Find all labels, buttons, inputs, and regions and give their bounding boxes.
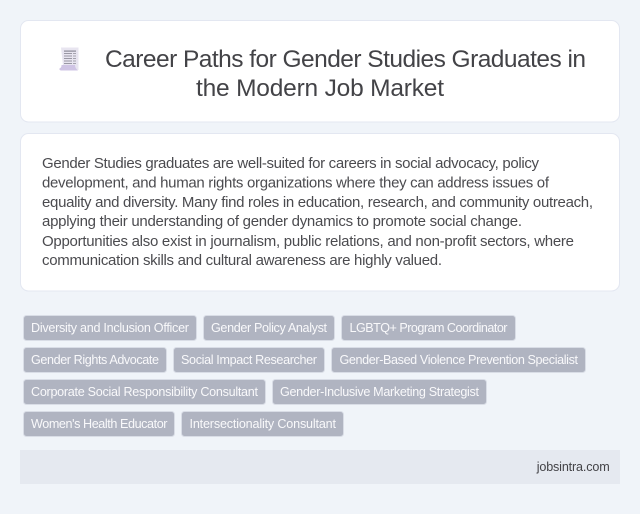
description text block: development, and human rights organizations where they can address issues of: [42, 174, 550, 192]
tag: Diversity and Inclusion Officer: [24, 316, 196, 340]
footer source text: jobsintra.com: [536, 460, 610, 474]
panel: description: [20, 134, 620, 291]
tag: Gender-Inclusive Marketing Strategist: [272, 380, 486, 404]
panel: title header: [20, 20, 620, 122]
description text block: Opportunities also exist in journalism, public relations, and non-profit sectors, where: [42, 233, 574, 250]
tag: Corporate Social Responsibility Consultant: Corporate Social Responsibility Consultant: [31, 385, 258, 399]
career tags: [24, 316, 586, 436]
description text block: equality and diversity. Many find roles in education, research, and community outreach,: [42, 194, 593, 211]
tag: Diversity and Inclusion Officer: Diversity and Inclusion Officer: [31, 321, 189, 335]
description text block: applying their understanding of gender dynamics to promote social change.: [42, 213, 522, 230]
tag: Social Impact Researcher: Social Impact Researcher: [181, 353, 317, 367]
description text block: [42, 155, 593, 269]
title: [105, 46, 586, 102]
icon: document scroll: [59, 48, 78, 70]
description text block: Gender Studies graduates are well-suited for careers in social advocacy, policy: [42, 155, 540, 172]
title: the Modern Job Market: [196, 75, 444, 102]
tag: LGBTQ+ Program Coordinator: [342, 316, 516, 340]
tag: LGBTQ+ Program Coordinator: LGBTQ+ Program Coordinator: [350, 321, 508, 335]
tag: Gender-Inclusive Marketing Strategist: Gender-Inclusive Marketing Strategist: [280, 385, 480, 399]
tag: Women's Health Educator: Women's Health Educator: [31, 417, 168, 431]
tag: Gender Policy Analyst: [204, 316, 334, 340]
footer bar: [20, 450, 620, 484]
tag: Intersectionality Consultant: Intersectionality Consultant: [190, 417, 336, 431]
tag: Women's Health Educator: [24, 412, 174, 436]
description text block: communication skills and cultural awareness are highly valued.: [42, 252, 442, 269]
tag: Social Impact Researcher: [174, 348, 324, 372]
tag: Gender Rights Advocate: Gender Rights Advocate: [31, 353, 159, 367]
title: Career Paths for Gender Studies Graduates in: [105, 46, 586, 73]
tag: Corporate Social Responsibility Consultant: [24, 380, 266, 404]
tag: Gender Rights Advocate: [24, 348, 166, 372]
tag: Gender Policy Analyst: Gender Policy Analyst: [211, 321, 328, 335]
tag: Gender-Based Violence Prevention Specialist: Gender-Based Violence Prevention Specialist: [340, 353, 578, 367]
tag: Gender-Based Violence Prevention Specialist: [332, 348, 586, 372]
tag: Intersectionality Consultant: [182, 412, 344, 436]
